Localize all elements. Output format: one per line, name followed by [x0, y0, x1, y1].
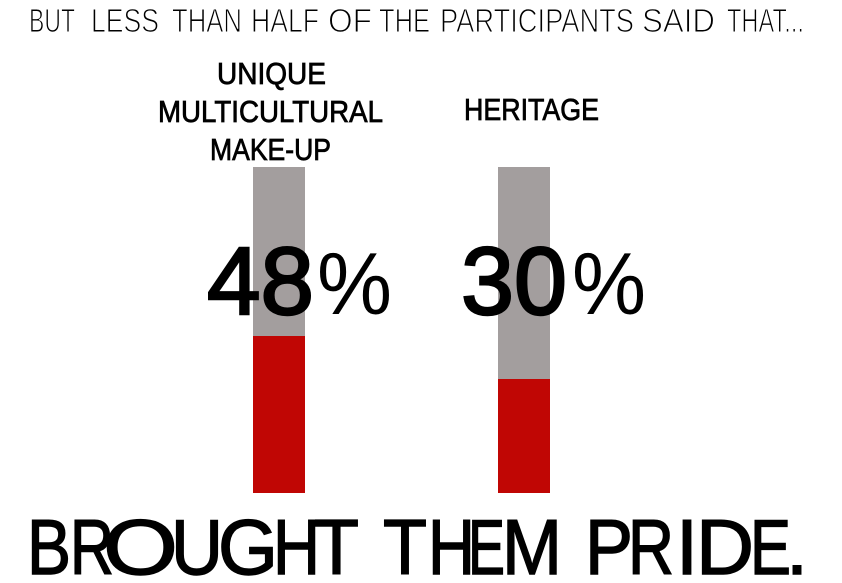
value: 30 percent: 30 — [461, 228, 567, 335]
label: heritage: HERITAGE — [464, 92, 599, 127]
label: unique multicultural make-up: MAKE-UP — [210, 132, 331, 167]
value: 48 percent: 48 — [207, 228, 314, 335]
intro heading: OF — [328, 2, 372, 39]
intro heading: PARTICIPANTS — [440, 2, 634, 39]
intro heading: HALF — [251, 2, 319, 39]
value: 48 percent: % — [317, 234, 392, 333]
closing statement — [27, 503, 808, 583]
intro heading: THAT... — [727, 2, 804, 39]
bar: 30 percent — [498, 167, 550, 493]
intro heading: SAID — [642, 2, 715, 39]
intro heading: LESS — [91, 2, 159, 39]
value: 30 percent: % — [572, 234, 646, 333]
label: unique multicultural make-up: UNIQUE — [217, 56, 326, 91]
bar: 48 percent — [253, 167, 305, 493]
intro heading — [29, 2, 804, 39]
label: unique multicultural make-up: MULTICULTURAL — [158, 94, 383, 129]
intro heading: THAN — [172, 2, 242, 39]
value: 30 percent — [461, 228, 646, 335]
intro heading: THE — [379, 2, 430, 39]
intro heading: BUT — [29, 2, 75, 39]
value: 48 percent — [207, 228, 392, 335]
label: unique multicultural make-up — [158, 56, 383, 167]
